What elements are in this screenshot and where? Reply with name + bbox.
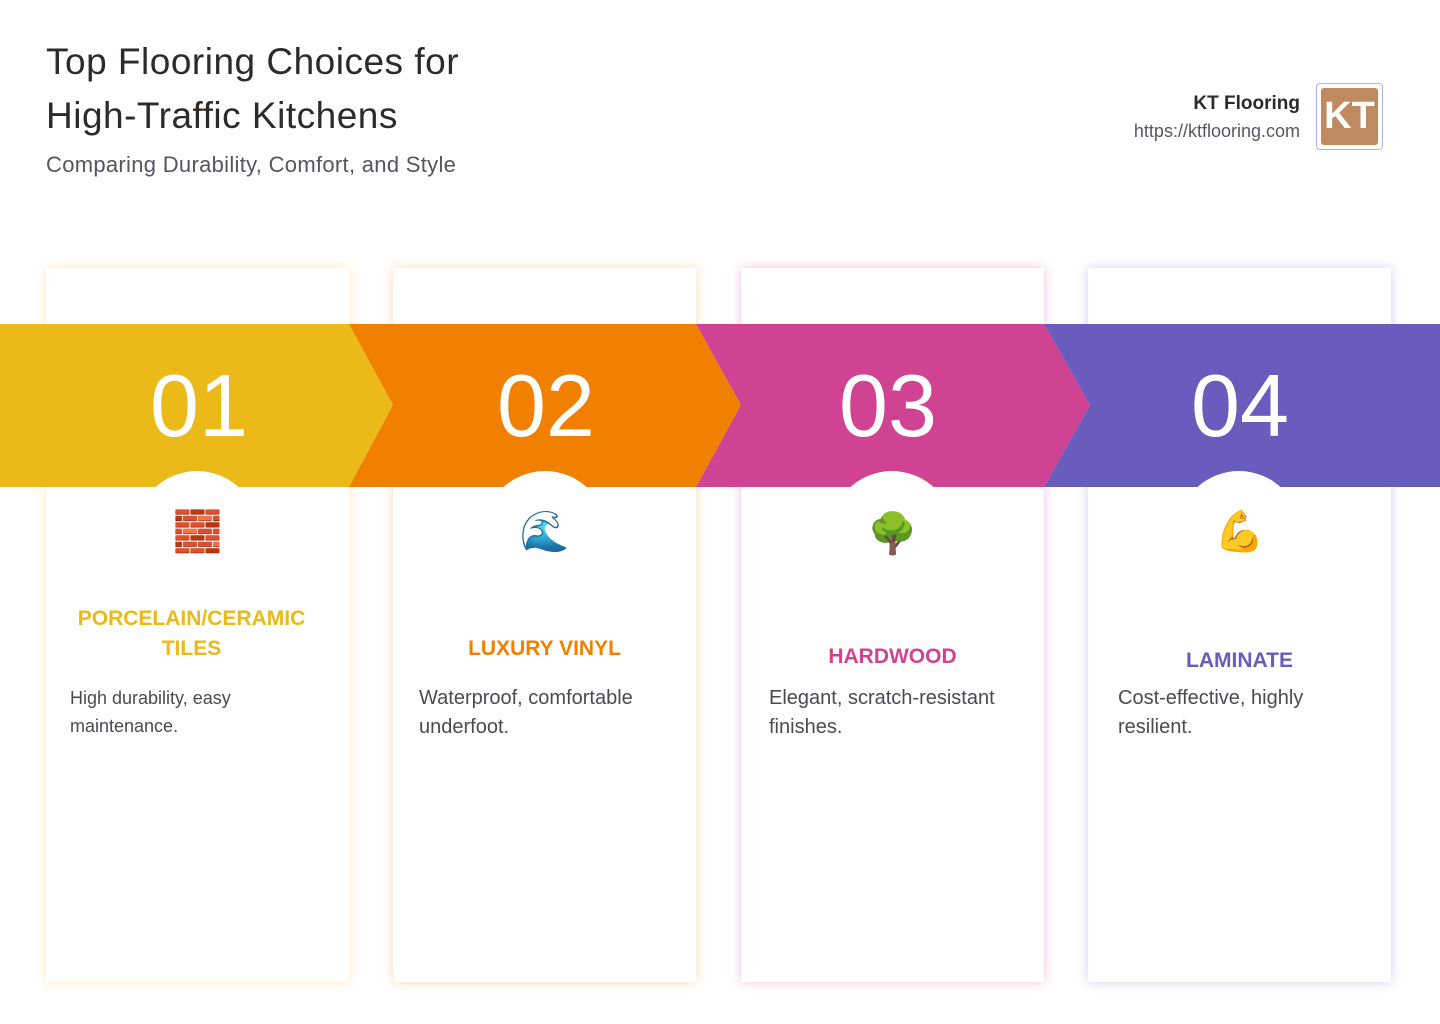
logo: KT <box>1324 95 1375 137</box>
chevron band: 02 <box>497 356 595 455</box>
brand text <box>1134 93 1300 141</box>
heading: LUXURY VINYL <box>468 637 621 660</box>
brand text: https://ktflooring.com <box>1134 121 1300 141</box>
icon: tree: 🌳 <box>868 512 917 556</box>
brand text: KT Flooring <box>1193 93 1300 114</box>
text: Waterproof, comfortable underfoot. <box>419 687 633 738</box>
card 1 <box>46 268 349 982</box>
heading: PORCELAIN/CERAMIC <box>78 607 305 630</box>
card 3 <box>741 268 1044 982</box>
icon: muscle: 💪 <box>1215 510 1264 554</box>
title <box>46 41 459 136</box>
heading <box>78 607 305 660</box>
text: Elegant, scratch-resistant finishes. <box>769 687 995 738</box>
panel 3 content <box>769 511 995 738</box>
chevron band: 03 <box>839 356 937 455</box>
chevron band: 04 <box>1191 356 1289 455</box>
card 4 <box>1088 268 1391 982</box>
text: Cost-effective, highly resilient. <box>1118 687 1303 738</box>
card 2 <box>393 268 696 982</box>
heading: TILES <box>162 637 221 660</box>
panel 4 content <box>1118 510 1304 738</box>
chevron band: 01 <box>150 356 248 455</box>
title: High-Traffic Kitchens <box>46 95 398 136</box>
text: High durability, easy maintenance. <box>70 688 231 736</box>
heading: LAMINATE <box>1186 649 1293 672</box>
panel 1 content <box>70 509 305 736</box>
icon: brick: 🧱 <box>173 510 222 554</box>
icon: wave: 🌊 <box>520 510 569 554</box>
heading: HARDWOOD <box>828 645 957 668</box>
logo <box>1316 83 1383 150</box>
brand <box>1134 83 1383 150</box>
subtitle: Comparing Durability, Comfort, and Style <box>46 152 456 177</box>
panel 2 content <box>419 510 633 738</box>
title: Top Flooring Choices for <box>46 41 459 82</box>
